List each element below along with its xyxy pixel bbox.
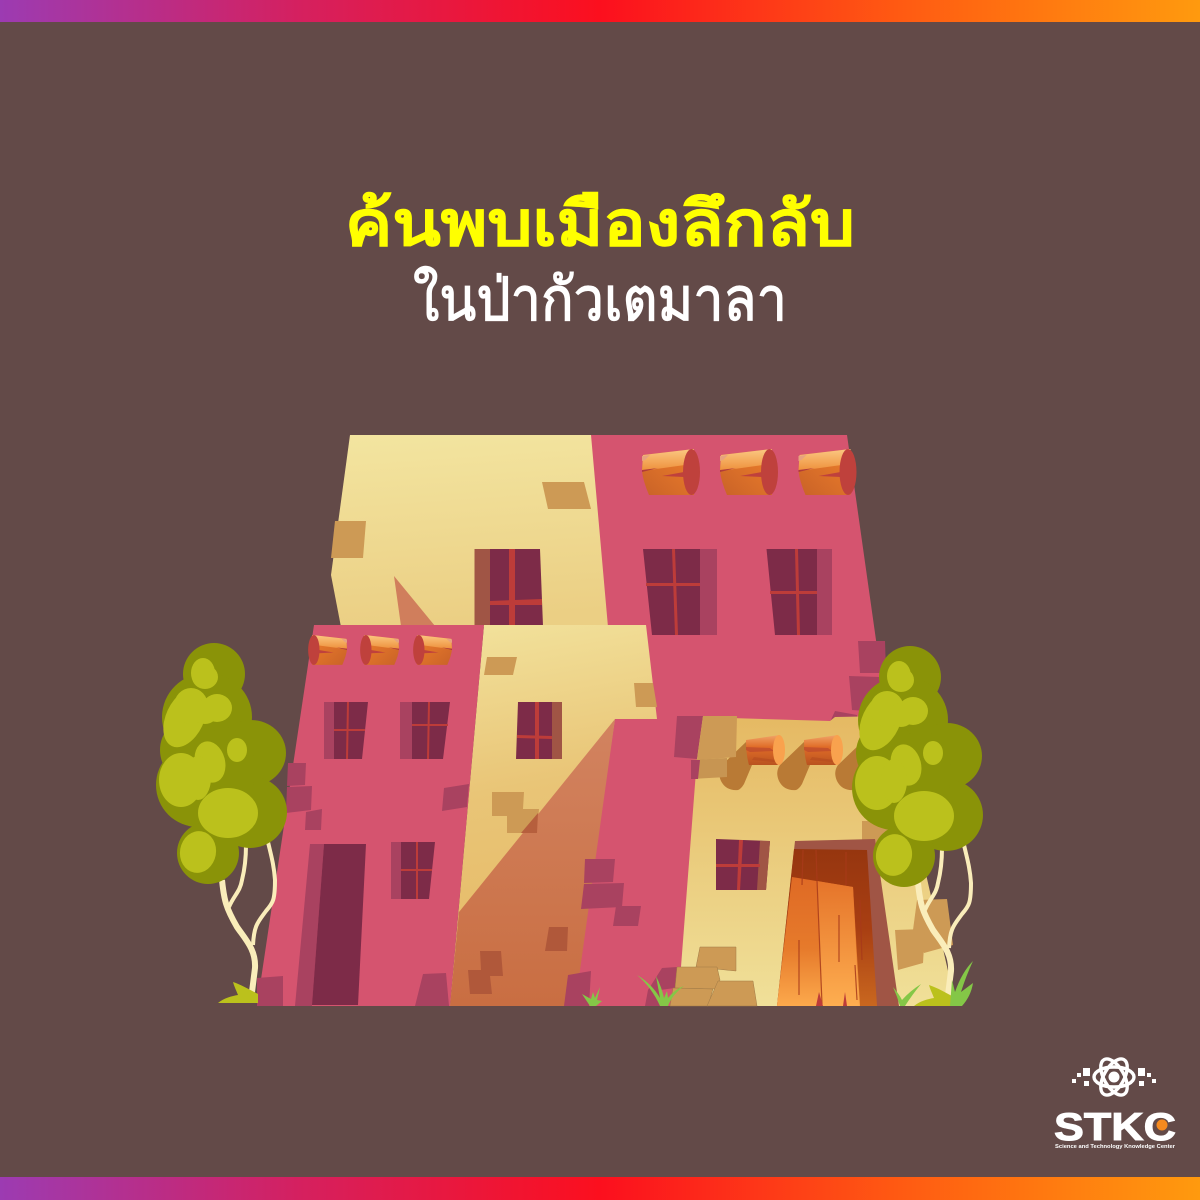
lower left log beam 3 [413, 635, 452, 665]
lower log beam 1 [746, 735, 785, 765]
pink building window 2 [400, 702, 450, 759]
timber shadows [719, 741, 868, 790]
logo orange dot [1156, 1120, 1168, 1130]
tower wall patches [564, 859, 641, 1006]
back left cream building [331, 435, 609, 627]
right cream building [665, 716, 956, 1006]
right building window [716, 839, 770, 890]
grass tufts [582, 961, 973, 1006]
back right pink building [591, 435, 886, 722]
pink building window 1 [324, 702, 368, 759]
bottom gradient bar [0, 1177, 1200, 1200]
logo pixel squares [1072, 1068, 1156, 1086]
upper log beam 1 [642, 449, 700, 495]
cream building window [516, 702, 562, 759]
lower left log beam 2 [360, 635, 399, 665]
wooden door [777, 839, 899, 1006]
subtitle: white heading: ในป่ากัวเตมาลา [413, 266, 787, 333]
upper log beam 2 [720, 449, 778, 495]
middle cream building [450, 625, 657, 1006]
lower left log beam 1 [308, 635, 347, 665]
lower left pink building [257, 625, 484, 1006]
left tree [155, 643, 287, 1003]
logo: STKC [1054, 1055, 1176, 1150]
rubble blocks [670, 947, 757, 1006]
upper log beam 3 [798, 449, 856, 495]
middle pink tower [572, 716, 737, 1006]
logo tagline: Science and Technology Knowledge Center [1055, 1144, 1176, 1150]
logo atom icon [1094, 1055, 1134, 1099]
pink building door [295, 844, 366, 1006]
lower log beam 2 [804, 735, 843, 765]
illustration: ancient city buildings [257, 435, 956, 1006]
right tree [851, 646, 983, 1006]
logo wordmark: STKC [1054, 1106, 1176, 1149]
pink building window 3 [391, 842, 435, 899]
top gradient bar [0, 0, 1200, 22]
title: yellow heading: ค้นพบเมืองลึกลับ [345, 190, 855, 259]
